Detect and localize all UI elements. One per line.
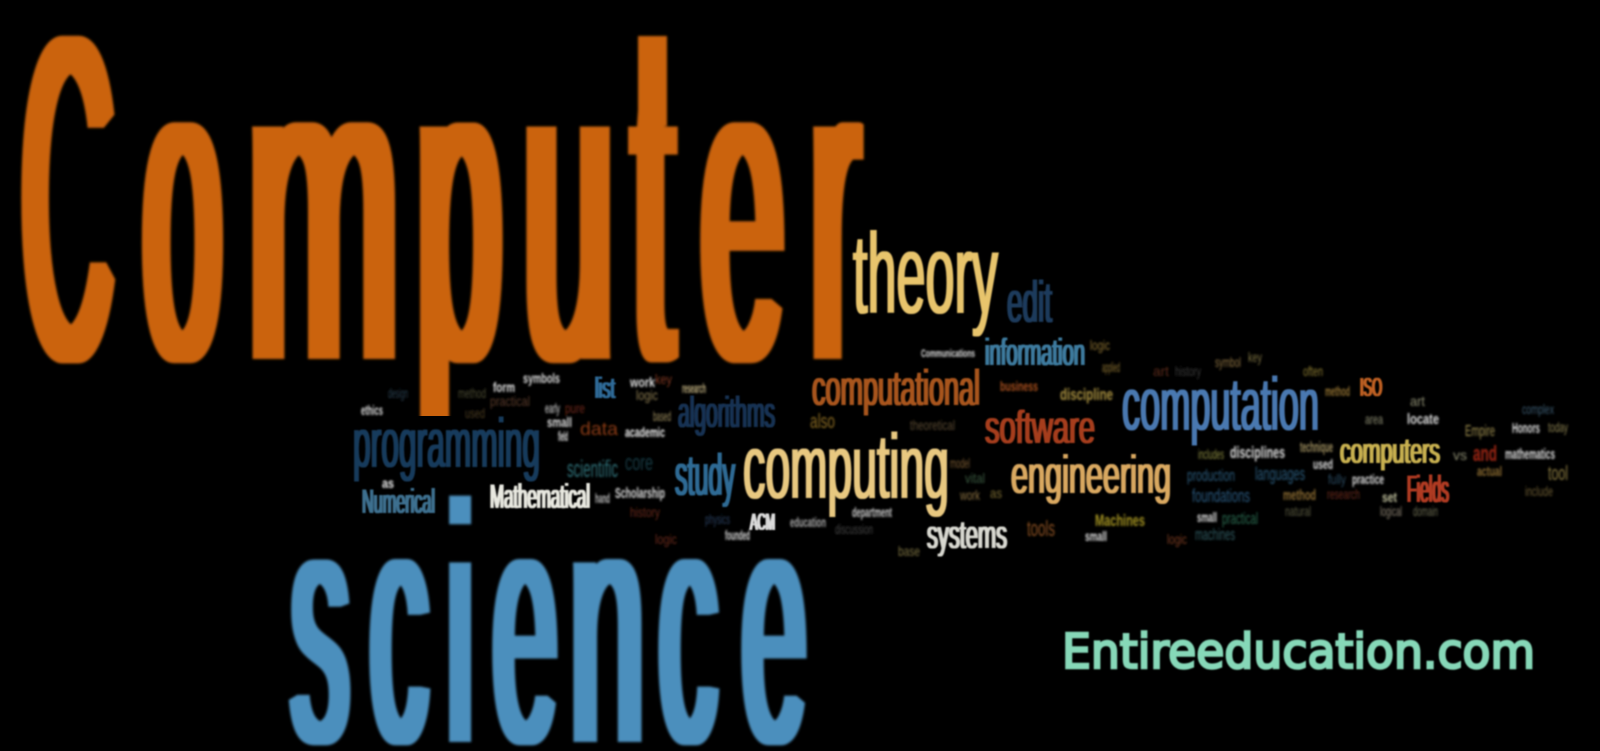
word cloud: small terms: design bbox=[388, 385, 408, 401]
word cloud: small terms: as bbox=[382, 475, 394, 491]
word cloud: small terms: technique bbox=[1300, 439, 1333, 456]
word cloud: small terms: theoretical bbox=[910, 417, 955, 433]
word cloud: small terms: method bbox=[1325, 383, 1350, 399]
word cloud: small terms: physics bbox=[705, 511, 730, 527]
word cloud: small terms: academic bbox=[625, 424, 665, 440]
word cloud: large terms: computation bbox=[1122, 362, 1319, 446]
word cloud: small terms: set bbox=[1382, 489, 1397, 505]
word cloud: small terms: fully bbox=[1328, 471, 1346, 487]
word cloud: small terms: Communications bbox=[921, 348, 975, 360]
word cloud: small terms: vs bbox=[1453, 447, 1467, 463]
heading word: Computer bbox=[19, 34, 866, 416]
word cloud: small terms: domain bbox=[1413, 503, 1438, 519]
word cloud: small terms: hand bbox=[595, 490, 610, 506]
word cloud: small terms: tool bbox=[1548, 463, 1568, 485]
word cloud: small terms: applied bbox=[1102, 359, 1120, 375]
word cloud: small terms: key bbox=[655, 371, 672, 387]
word cloud: small terms: discussion bbox=[835, 521, 873, 537]
word cloud: small terms: small bbox=[1197, 509, 1217, 525]
word cloud: small terms: area bbox=[1365, 411, 1383, 427]
word cloud: small terms: used bbox=[1313, 456, 1333, 472]
word cloud: large terms: study bbox=[675, 443, 735, 508]
word cloud: small terms: history bbox=[630, 504, 660, 520]
word cloud: small terms: art bbox=[1153, 363, 1169, 379]
word cloud: large terms: edit bbox=[1007, 270, 1052, 335]
word cloud: small terms: logical bbox=[1380, 503, 1402, 519]
word cloud: small terms: method bbox=[1283, 487, 1316, 504]
word: systems: systems bbox=[927, 513, 1007, 557]
word cloud: small terms: vital bbox=[965, 470, 985, 486]
word cloud: small terms: based bbox=[653, 408, 671, 424]
infographic canvas: Fields bbox=[1407, 469, 1449, 511]
word cloud: large terms: Numerical bbox=[362, 483, 435, 521]
word cloud: small terms: as bbox=[990, 485, 1002, 501]
word cloud: small terms: scientific bbox=[567, 456, 618, 483]
word cloud: large terms: ACM bbox=[750, 509, 775, 536]
word cloud: small terms: natural bbox=[1285, 503, 1311, 519]
word cloud: small terms: logic bbox=[655, 531, 677, 547]
word cloud: small terms: data bbox=[580, 419, 619, 439]
word cloud: small terms: small bbox=[547, 414, 572, 430]
word cloud: small terms: early bbox=[545, 400, 560, 416]
word cloud: small terms: model bbox=[950, 455, 970, 471]
word cloud: small terms: research bbox=[682, 380, 706, 396]
word cloud: large terms: computing bbox=[743, 416, 949, 518]
word cloud: small terms: often bbox=[1303, 363, 1323, 379]
word cloud: small terms bbox=[361, 337, 1568, 559]
word cloud: small terms: key bbox=[1248, 349, 1262, 365]
word cloud: small terms: and bbox=[1473, 441, 1497, 466]
word cloud: small terms: actual bbox=[1477, 463, 1502, 479]
word cloud: small terms: disciplines bbox=[1230, 443, 1285, 462]
word cloud: small terms: art bbox=[1410, 393, 1425, 409]
word cloud: small terms: Honors bbox=[1512, 420, 1540, 437]
word cloud: small terms: core bbox=[625, 450, 653, 475]
word cloud: small terms: Empire bbox=[1465, 423, 1495, 440]
word cloud: small terms: discipline bbox=[1060, 385, 1113, 404]
word cloud: small terms: mathematics bbox=[1505, 446, 1555, 463]
word cloud: small terms: used bbox=[465, 405, 485, 421]
word: engineering: engineering bbox=[1011, 445, 1171, 505]
word cloud: small terms: logic bbox=[1167, 531, 1187, 547]
word cloud: small terms: method bbox=[458, 385, 486, 401]
word cloud: small terms: work bbox=[959, 487, 981, 503]
word cloud: large terms: algorithms bbox=[678, 388, 775, 437]
website credit: Entireeducation.com bbox=[1062, 624, 1535, 680]
word cloud: small terms: field bbox=[558, 428, 568, 444]
word cloud: small terms: Machines bbox=[1095, 511, 1145, 530]
word cloud: small terms: research bbox=[1327, 486, 1360, 502]
word cloud: small terms: include bbox=[1525, 483, 1553, 499]
word cloud: large terms: programming bbox=[353, 404, 540, 482]
word cloud: small terms: includes bbox=[1198, 446, 1224, 462]
word: information: information bbox=[985, 332, 1085, 374]
word cloud: small terms: logic bbox=[636, 387, 658, 403]
word cloud: small terms: symbols bbox=[523, 370, 560, 386]
word cloud: small terms: practical bbox=[1222, 509, 1258, 528]
heading word: science bbox=[287, 470, 809, 751]
word cloud: small terms: practice bbox=[1352, 471, 1384, 487]
word cloud: small terms: department bbox=[852, 504, 892, 520]
word cloud: small terms: pure bbox=[565, 400, 585, 416]
word cloud: small terms: complex bbox=[1522, 401, 1554, 417]
word cloud: small terms: history bbox=[1175, 363, 1201, 379]
word cloud: small terms: base bbox=[898, 543, 920, 559]
word cloud: small terms: founded bbox=[725, 527, 750, 543]
word: computers: computers bbox=[1340, 430, 1440, 471]
word cloud: small terms: production bbox=[1187, 466, 1235, 485]
word cloud: small terms: today bbox=[1548, 419, 1568, 435]
word cloud: small terms: languages bbox=[1255, 464, 1305, 484]
word cloud: small terms: small bbox=[1085, 528, 1107, 544]
word cloud: small terms: symbol bbox=[1215, 354, 1241, 370]
word: list: list bbox=[595, 372, 615, 405]
word: software: software bbox=[985, 401, 1095, 453]
word cloud: small terms: form bbox=[493, 379, 515, 395]
word cloud: small terms: locate bbox=[1407, 411, 1439, 428]
word cloud: small terms: machines bbox=[1195, 525, 1235, 544]
word cloud: small terms: foundations bbox=[1192, 486, 1250, 506]
word cloud: large terms: ISO bbox=[1360, 372, 1382, 402]
word cloud: small terms: practical bbox=[490, 393, 530, 409]
word cloud: small terms: work bbox=[629, 374, 655, 390]
word cloud: small terms: Scholarship bbox=[615, 485, 665, 502]
word cloud: large terms bbox=[353, 211, 1449, 557]
word: computational: computational bbox=[812, 360, 980, 416]
word cloud: small terms: education bbox=[790, 514, 826, 530]
word cloud: large terms: Mathematical bbox=[490, 478, 590, 516]
word cloud: large terms: theory bbox=[853, 211, 998, 338]
word cloud: small terms: business bbox=[1000, 378, 1038, 394]
word cloud: small terms: tools bbox=[1027, 516, 1055, 541]
word cloud: small terms: logic bbox=[1090, 337, 1110, 353]
word cloud: small terms: also bbox=[810, 411, 835, 433]
word cloud: small terms: ethics bbox=[361, 402, 383, 418]
